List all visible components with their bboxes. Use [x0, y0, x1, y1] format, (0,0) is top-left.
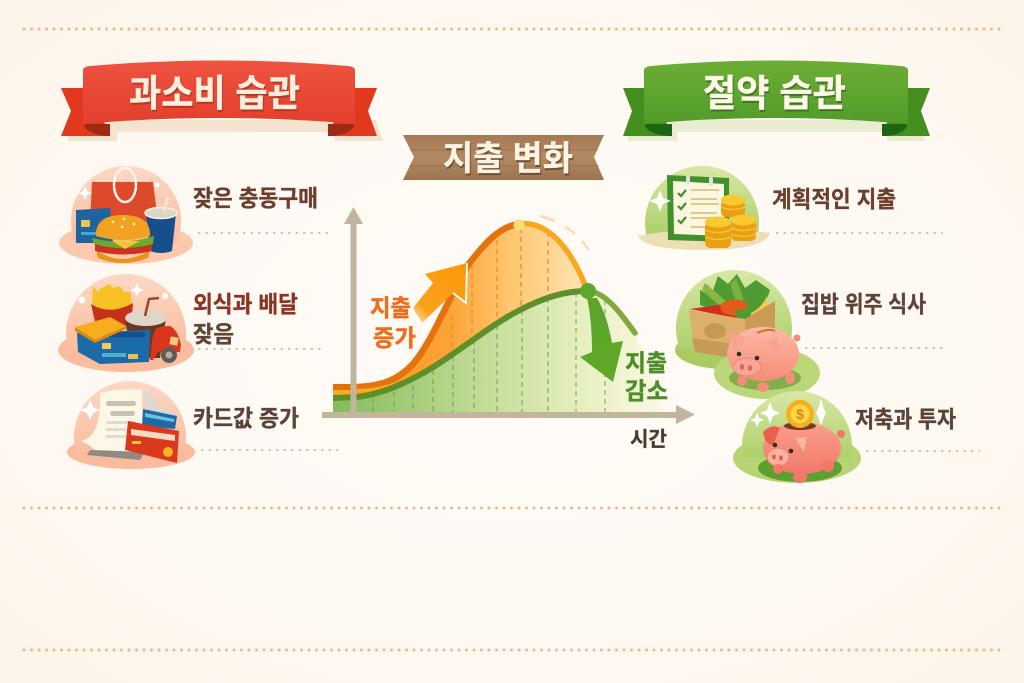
crossover marker [580, 283, 596, 299]
banner title: 과소비 습관: 과소비 습관 [129, 73, 300, 114]
chart area: saving fill [333, 291, 665, 412]
label: frequent eating out and delivery [193, 291, 323, 349]
label: time axis: 시간 [630, 428, 667, 451]
vertical axis [344, 207, 363, 415]
label: spending decrease [625, 350, 668, 404]
icon: piggy bank and coin: $ [796, 406, 804, 422]
label: frequent eating out and delivery: 잦음 [193, 321, 234, 347]
label: spending increase [370, 295, 416, 351]
label: savings and investment [855, 406, 980, 451]
icon: grocery box and piggy bank [675, 270, 820, 399]
icon: piggy bank and coin [733, 391, 861, 483]
arrow: spending increase [413, 263, 467, 323]
horizontal axis and arrow [322, 405, 695, 424]
label: planned spending: 계획적인 지출 [772, 186, 896, 212]
icon: bills and credit cards [67, 381, 195, 469]
label: card bills increase: 카드값 증가 [193, 405, 299, 431]
label: home-cooked meals: 집밥 위주 식사 [801, 291, 926, 317]
banner: overspending habits [61, 60, 383, 141]
chart area: overspending fill [333, 224, 587, 412]
orange spending curve [357, 224, 519, 387]
label: frequent impulse buying [193, 185, 333, 233]
label: spending decrease: 감소 [625, 378, 668, 404]
label: frequent eating out and delivery: 외식과 배달 [193, 291, 298, 317]
label: spending increase: 지출 [370, 295, 411, 321]
label: savings and investment: 저축과 투자 [855, 406, 956, 432]
icon: checklist and coins [638, 166, 770, 250]
dashed projection [540, 216, 589, 250]
label: frequent impulse buying: 잦은 충동구매 [193, 185, 318, 211]
green spending curve [333, 291, 588, 398]
label: spending decrease: 지출 [625, 350, 667, 376]
banner title: 절약 습관: 절약 습관 [703, 73, 846, 114]
sign title: 지출 변화: 지출 변화 [443, 140, 573, 178]
label: spending increase: 증가 [373, 325, 416, 351]
chart: spending over time [322, 207, 695, 451]
arrow: spending decrease [580, 298, 623, 382]
banner: saving habits [623, 60, 930, 141]
icon: fries, drink, card box and delivery scooter [58, 274, 194, 372]
peak marker [514, 220, 524, 230]
wooden sign: spending change [403, 135, 604, 180]
icon: shopping bag, card, burger and drink [59, 166, 193, 264]
